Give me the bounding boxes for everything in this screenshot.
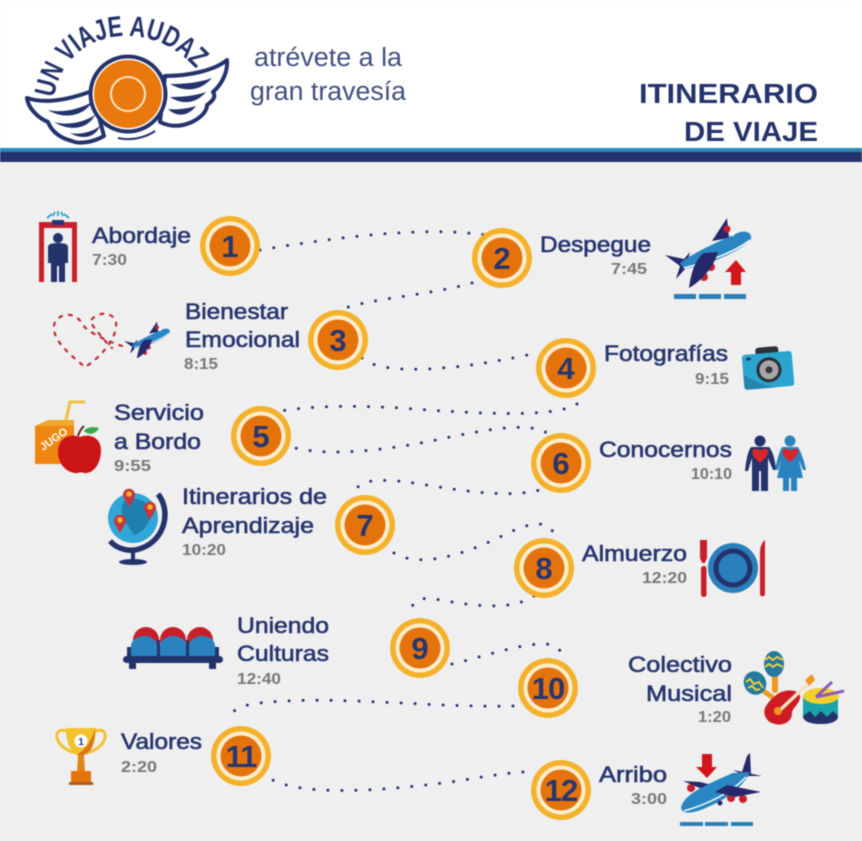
time: 12:40 (237, 671, 281, 688)
icon: couple with hearts (745, 436, 806, 491)
time: 7:30 (92, 252, 127, 269)
icon: left wing (27, 91, 104, 143)
time: 9:55 (114, 458, 151, 475)
icon: globe with pins (108, 489, 165, 565)
badge 8: 8 (535, 551, 553, 586)
label: Aprendizaje (182, 513, 314, 538)
icon: juice box and apple (35, 402, 101, 473)
icon: trophy (57, 728, 105, 785)
badge 7 (335, 495, 395, 555)
label: Arribo (599, 762, 667, 787)
badge 12 (531, 760, 591, 820)
label: Culturas (237, 641, 329, 666)
label: Despegue (540, 232, 651, 257)
badge 5: 5 (252, 419, 270, 454)
step 1: Abordaje (39, 211, 260, 282)
badge 2 (472, 228, 532, 288)
title: DE VIAJE (684, 116, 818, 147)
label: Abordaje (92, 223, 191, 248)
badge 8 (514, 538, 574, 598)
label: Colectivo (628, 652, 732, 677)
badge 10 (518, 658, 578, 718)
step 7: Itinerarios de Aprendizaje (108, 484, 395, 565)
label: Valores (121, 729, 202, 754)
icon: camera (741, 345, 794, 390)
icon: security gate (39, 211, 77, 282)
tagline (250, 44, 407, 106)
dotted route (231, 232, 577, 791)
time: 10:20 (182, 542, 226, 559)
badge 9 (390, 618, 450, 678)
badge 2: 2 (493, 241, 511, 276)
step 10: Colectivo Musical (518, 651, 844, 726)
badge 5 (231, 406, 291, 466)
icon: juice box and apple: JUGO (38, 425, 71, 453)
step 3: Bienestar Emocional (54, 299, 368, 373)
label: Servicio (114, 400, 204, 425)
icon: heart trail and plane (54, 314, 170, 367)
step 6: Conocernos (531, 433, 806, 493)
icon: orange wheel (88, 54, 168, 134)
logo arc text: UN VIAJE AUDAZ (34, 15, 210, 96)
label (114, 400, 204, 454)
icon: plane landing (680, 753, 762, 826)
label (182, 484, 327, 538)
label (237, 613, 329, 666)
badge 6 (531, 433, 591, 493)
time: 9:15 (695, 371, 729, 388)
header band (0, 0, 862, 162)
badge 6: 6 (552, 446, 570, 481)
step 2: Despegue (472, 218, 751, 299)
step 11: Valores (57, 726, 271, 786)
time: 3:00 (631, 791, 667, 808)
logo: Un Viaje Audaz (24, 15, 230, 146)
tagline: gran travesía (250, 78, 407, 106)
label: Conocernos (599, 437, 732, 462)
badge 10: 10 (532, 671, 564, 706)
step 8: Almuerzo (514, 538, 765, 598)
badge 1: 1 (221, 229, 239, 264)
icon: trophy: 1 (78, 737, 84, 748)
label: Bienestar (185, 299, 288, 324)
time: 7:45 (611, 261, 647, 278)
badge 3 (308, 310, 368, 370)
step 5: Servicio a Bordo (35, 400, 291, 475)
icon: row of seats (123, 627, 223, 669)
icon: musical instruments (739, 651, 844, 725)
time: 2:20 (121, 759, 157, 776)
time: 12:20 (642, 570, 687, 587)
time: 10:10 (691, 466, 732, 483)
title: ITINERARIO (639, 78, 818, 109)
label (185, 299, 300, 352)
label: a Bordo (114, 429, 201, 454)
badge 4: 4 (557, 351, 575, 386)
badge 11: 11 (226, 739, 257, 774)
step 9: Uniendo Culturas (123, 613, 450, 688)
label (628, 652, 732, 706)
badge 1 (200, 216, 260, 276)
step 4: Fotografías (536, 338, 794, 398)
label: Almuerzo (582, 541, 687, 566)
label: Fotografías (604, 341, 728, 366)
label: Uniendo (237, 613, 329, 638)
badge 11 (211, 726, 271, 786)
badge 3: 3 (329, 323, 347, 358)
swoosh under wheel (118, 131, 155, 139)
label: Emocional (185, 327, 300, 352)
icon: plate and cutlery (700, 540, 765, 597)
title (639, 78, 818, 147)
time: 8:15 (184, 356, 218, 373)
label: Itinerarios de (182, 484, 327, 509)
tagline: atrévete a la (254, 44, 403, 72)
icon: right wing (160, 60, 227, 126)
badge 12: 12 (545, 773, 577, 808)
time: 1:20 (698, 709, 731, 726)
badge 7: 7 (356, 508, 374, 543)
label: Musical (646, 681, 732, 706)
icon: plane taking off (665, 218, 751, 299)
badge 4 (536, 338, 596, 398)
badge 9: 9 (411, 631, 429, 666)
step 12: Arribo (531, 753, 762, 826)
